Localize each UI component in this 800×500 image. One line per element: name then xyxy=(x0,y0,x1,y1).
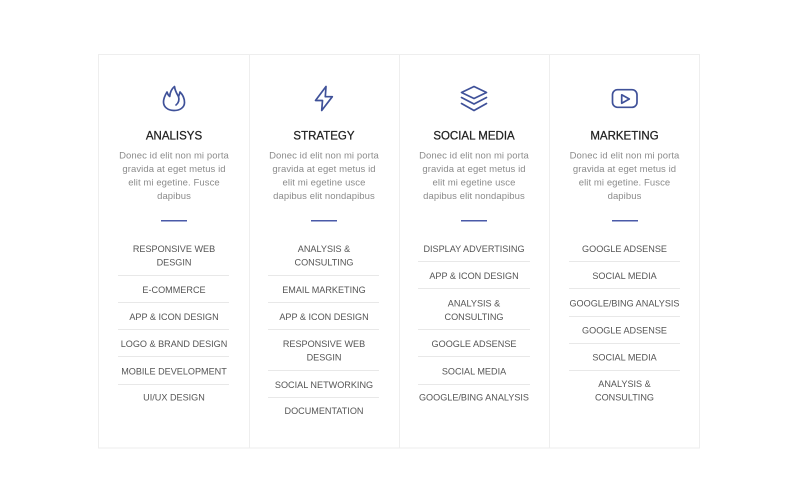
description: marketing xyxy=(570,150,680,202)
list: analisys services: LOGO & BRAND DESIGN xyxy=(121,339,227,349)
list: strategy services: EMAIL MARKETING xyxy=(282,285,366,295)
description: strategy: dapibus elit nondapibus xyxy=(273,191,375,202)
description: analisys: elit mi egetine. Fusce xyxy=(128,178,220,188)
icon: flame xyxy=(164,86,184,110)
list: analisys services: E-COMMERCE xyxy=(142,285,206,295)
list: social media services xyxy=(418,244,530,402)
description: analisys: dapibus xyxy=(157,191,191,202)
list: marketing services: GOOGLE/BING ANALYSIS xyxy=(569,298,680,308)
list: analisys services: RESPONSIVE WEB xyxy=(133,244,215,254)
description: strategy: Donec id elit non mi porta xyxy=(269,150,380,162)
description: strategy xyxy=(269,150,380,202)
heading: marketing: MARKETING xyxy=(590,130,659,142)
list: strategy services: CONSULTING xyxy=(295,258,353,268)
pricing grid frame xyxy=(98,54,700,448)
panel: analisys xyxy=(118,86,230,402)
panel: strategy xyxy=(268,86,380,416)
list: marketing services: GOOGLE ADSENSE xyxy=(582,244,667,254)
list: analisys services: UI/UX DESIGN xyxy=(143,392,205,402)
list: social media services: ANALYSIS & xyxy=(448,298,500,308)
description: marketing: elit mi egetine. Fusce xyxy=(579,178,670,188)
list: marketing services: SOCIAL MEDIA xyxy=(592,352,658,362)
list: analisys services: DESGIN xyxy=(157,258,191,268)
panel: social media xyxy=(418,86,530,402)
list: strategy services: DESGIN xyxy=(307,352,341,362)
description: strategy: gravida at eget metus id xyxy=(272,164,376,175)
icon: layers xyxy=(462,86,486,110)
list: strategy services xyxy=(268,244,379,416)
description: marketing: dapibus xyxy=(608,191,642,202)
description: social media: gravida at eget metus id xyxy=(422,164,526,175)
description: social media: Donec id elit non mi porta xyxy=(419,150,530,162)
description: analisys: Donec id elit non mi porta xyxy=(119,150,230,162)
heading: analisys: ANALISYS xyxy=(146,130,202,142)
description: strategy: elit mi egetine usce xyxy=(283,178,365,188)
list: strategy services: SOCIAL NETWORKING xyxy=(275,380,373,390)
list: strategy services: APP & ICON DESIGN xyxy=(279,312,369,322)
accent divider xyxy=(612,220,638,222)
description: analisys: gravida at eget metus id xyxy=(122,164,226,175)
list: social media services: DISPLAY ADVERTISING xyxy=(423,244,525,254)
list: marketing services xyxy=(569,244,680,402)
list: analisys services: MOBILE DEVELOPMENT xyxy=(121,366,227,376)
list: social media services: GOOGLE ADSENSE xyxy=(432,339,516,349)
heading: social media: SOCIAL MEDIA xyxy=(433,130,515,142)
panel: marketing xyxy=(569,90,680,402)
list: marketing services: CONSULTING xyxy=(595,392,654,402)
list: marketing services: GOOGLE ADSENSE xyxy=(582,326,667,336)
list: strategy services: ANALYSIS & xyxy=(298,244,350,254)
description: social media: dapibus elit nondapibus xyxy=(423,191,525,202)
list: social media services: CONSULTING xyxy=(445,312,503,322)
list: social media services: SOCIAL MEDIA xyxy=(442,366,507,376)
description: social media xyxy=(419,150,530,202)
list: social media services: GOOGLE/BING ANALYSIS xyxy=(419,392,529,402)
accent divider xyxy=(311,220,337,222)
list: analisys services xyxy=(118,244,229,402)
description: social media: elit mi egetine usce xyxy=(433,178,515,188)
heading: strategy: STRATEGY xyxy=(293,130,355,142)
icon: video play xyxy=(612,90,637,107)
accent divider xyxy=(161,220,187,222)
description: marketing: Donec id elit non mi porta xyxy=(570,150,680,162)
list: social media services: APP & ICON DESIGN xyxy=(429,271,519,281)
description: analisys xyxy=(119,150,230,202)
list: marketing services: SOCIAL MEDIA xyxy=(592,271,658,281)
icon: lightning bolt xyxy=(316,86,332,110)
list: strategy services: DOCUMENTATION xyxy=(285,406,363,416)
accent divider xyxy=(461,220,487,222)
list: marketing services: ANALYSIS & xyxy=(598,379,651,389)
list: strategy services: RESPONSIVE WEB xyxy=(283,339,365,349)
list: analisys services: APP & ICON DESIGN xyxy=(129,312,219,322)
description: marketing: gravida at eget metus id xyxy=(573,164,676,175)
